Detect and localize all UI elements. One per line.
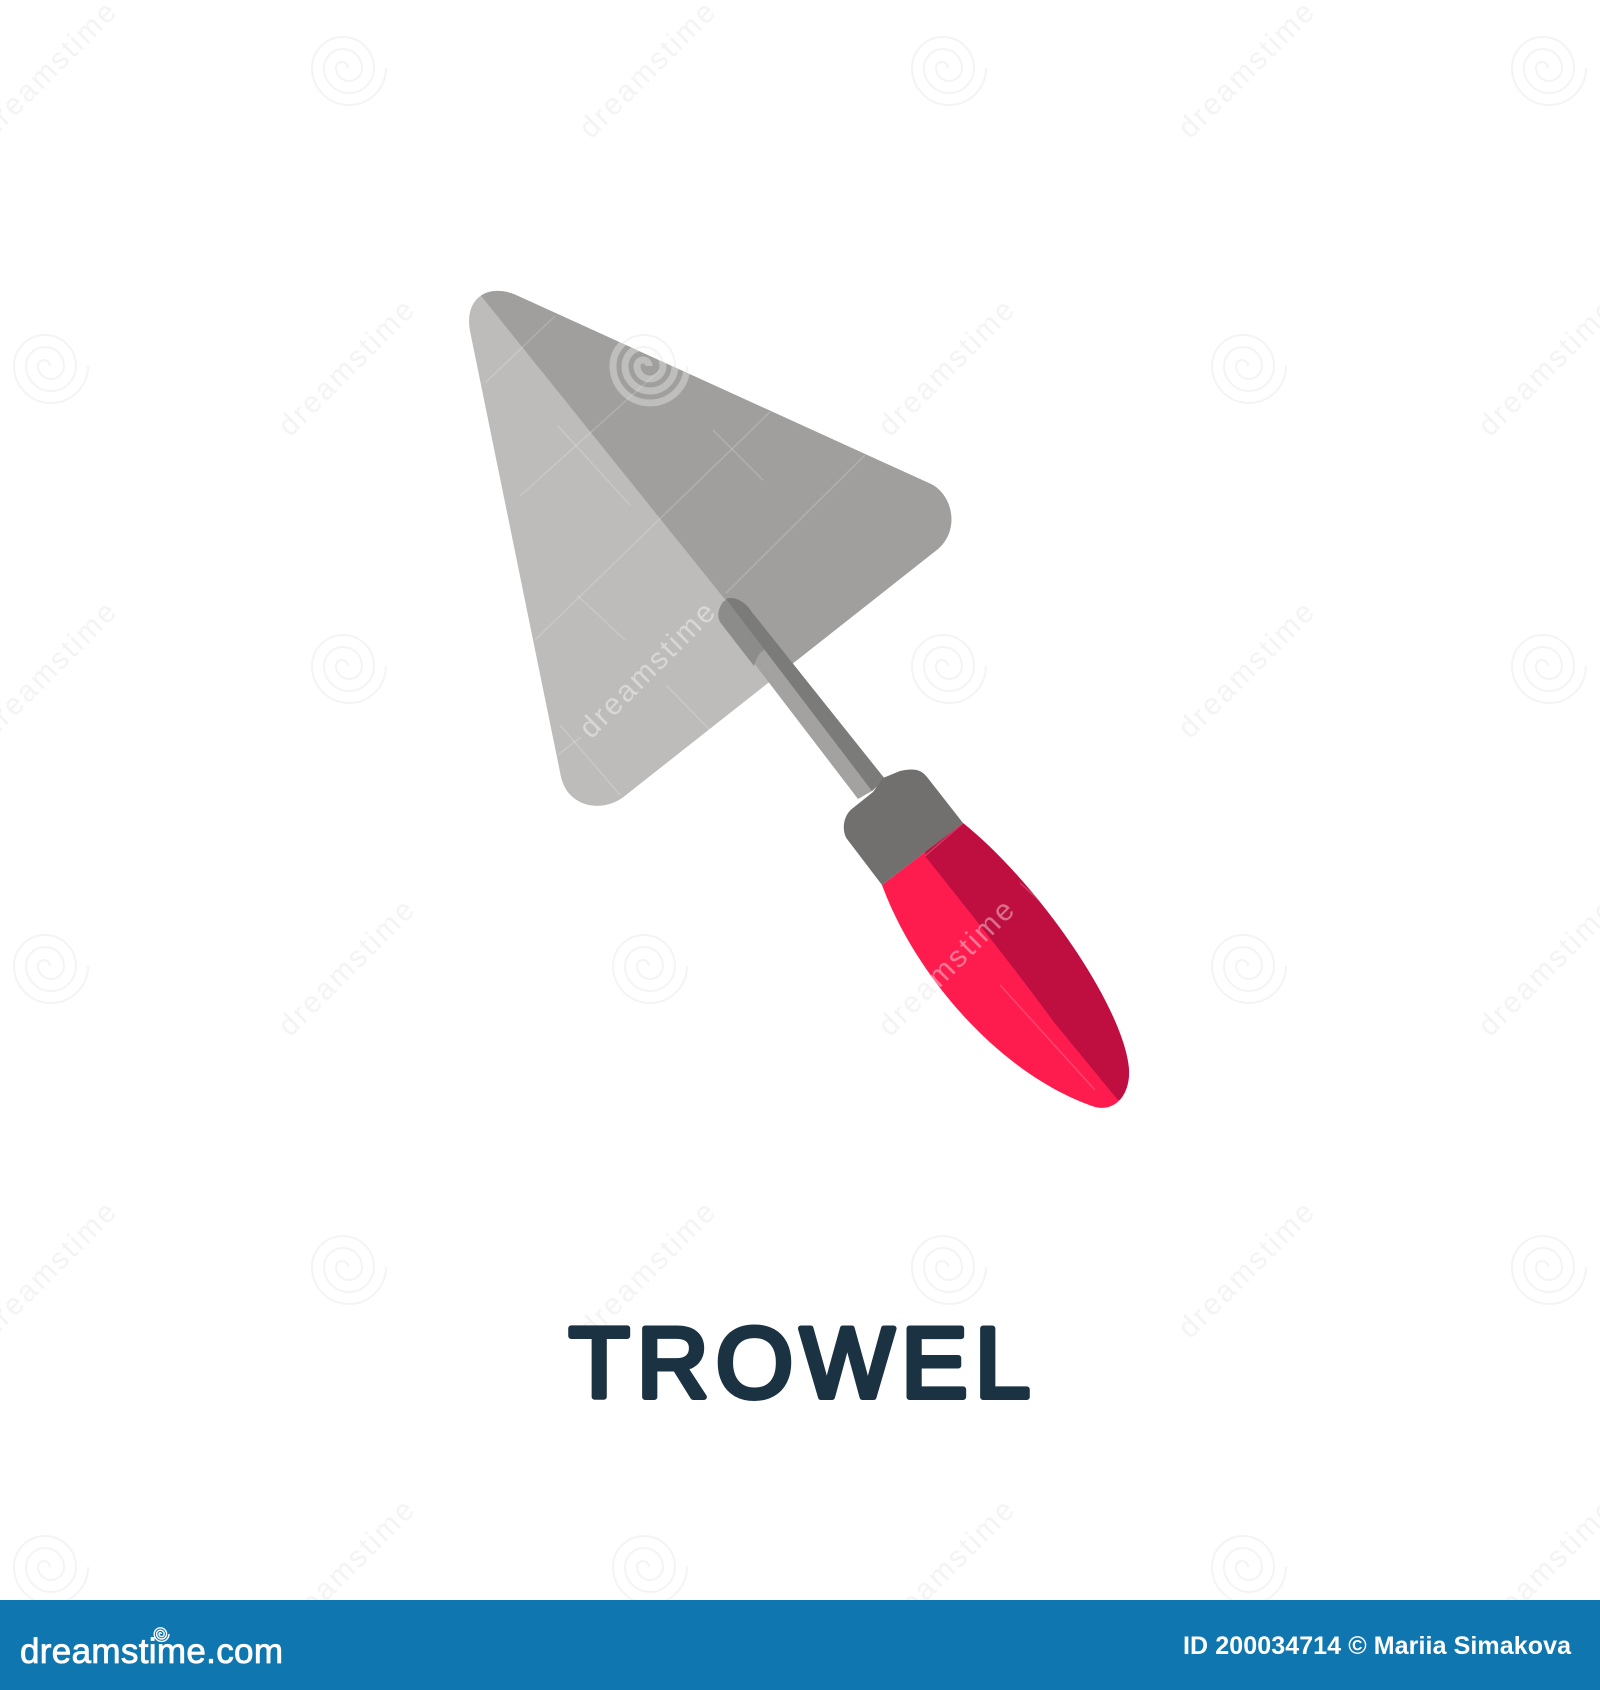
footer logo: dreamstime.com bbox=[20, 1632, 283, 1671]
watermark overlay on trowel: dreamstime bbox=[872, 894, 1021, 1043]
watermark pattern: dreamstime bbox=[872, 1494, 1021, 1643]
watermark pattern: dreamstime bbox=[272, 1494, 421, 1643]
footer credit: ID 200034714 © Mariia Simakova bbox=[1183, 1632, 1572, 1660]
trowel handle bbox=[882, 823, 1130, 1108]
icon: trowel bbox=[450, 270, 1140, 1120]
trowel blade bbox=[469, 290, 952, 806]
footer bar bbox=[0, 1600, 1600, 1690]
watermark pattern: dreamstime bbox=[272, 894, 421, 1043]
title: TROWEL bbox=[569, 1307, 1030, 1418]
watermark pattern: dreamstime bbox=[573, 1196, 722, 1345]
watermark pattern: dreamstime bbox=[573, 0, 722, 145]
watermark pattern: dreamstime bbox=[1172, 596, 1321, 745]
watermark pattern: dreamstime bbox=[872, 894, 1021, 1043]
trowel shaft bbox=[718, 598, 885, 799]
trowel collar bbox=[844, 769, 963, 885]
watermark overlay on trowel: dreamstime bbox=[573, 596, 722, 745]
watermark pattern: dreamstime bbox=[872, 294, 1021, 443]
watermark pattern: dreamstime bbox=[272, 294, 421, 443]
watermark overlay on trowel bbox=[485, 316, 1095, 1090]
watermark pattern: dreamstime bbox=[1172, 1196, 1321, 1345]
watermark pattern: dreamstime bbox=[1172, 0, 1321, 145]
